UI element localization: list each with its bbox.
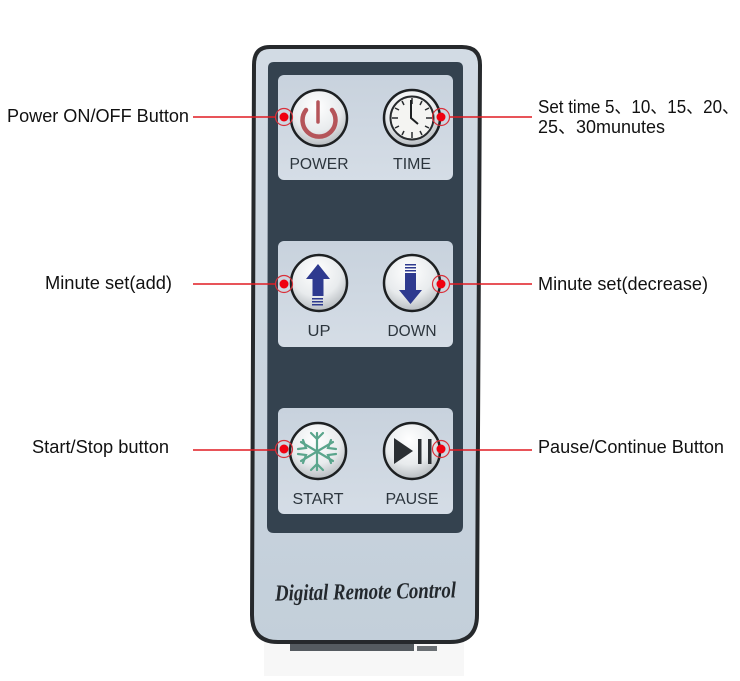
callout: minute add <box>45 273 292 293</box>
callout: pause continue: Pause/Continue Button <box>538 437 724 457</box>
panel: start and pause <box>278 408 453 514</box>
pause button: PAUSE <box>386 491 438 508</box>
down button <box>384 255 440 340</box>
time button <box>384 90 440 173</box>
up button <box>291 255 347 340</box>
power button <box>290 90 348 173</box>
start button: START <box>292 491 344 508</box>
callout: time <box>432 97 739 137</box>
panel: power and time <box>278 75 453 180</box>
icon: down arrow <box>399 264 422 304</box>
brand text: Digital Remote Control <box>274 577 457 606</box>
power button: POWER <box>290 156 348 173</box>
icon: up arrow <box>306 264 330 306</box>
callout: minute decrease <box>432 274 708 294</box>
callout: minute decrease: Minute set(decrease) <box>538 274 708 294</box>
up button: UP <box>308 323 330 340</box>
shadow below remote <box>264 640 464 676</box>
callout: start stop <box>32 437 292 458</box>
time button: TIME <box>393 156 431 173</box>
callout: pause continue <box>432 437 724 458</box>
icon: snowflake <box>298 433 336 470</box>
callout: power: Power ON/OFF Button <box>7 106 189 126</box>
icon: power <box>302 102 336 137</box>
start button <box>290 423 346 508</box>
callout: power <box>7 106 292 126</box>
bottom connector strip <box>290 644 437 651</box>
dark control panel <box>267 62 463 533</box>
remote control body <box>252 47 480 642</box>
callout: minute add: Minute set(add) <box>45 273 172 293</box>
panel: up and down <box>278 241 453 347</box>
down button: DOWN <box>388 323 436 340</box>
pause button <box>384 423 440 508</box>
icon: play pause <box>394 438 432 464</box>
callout: time: 25、30munutes <box>538 117 665 137</box>
callout: start stop: Start/Stop button <box>32 437 169 457</box>
icon: clock <box>390 96 434 140</box>
